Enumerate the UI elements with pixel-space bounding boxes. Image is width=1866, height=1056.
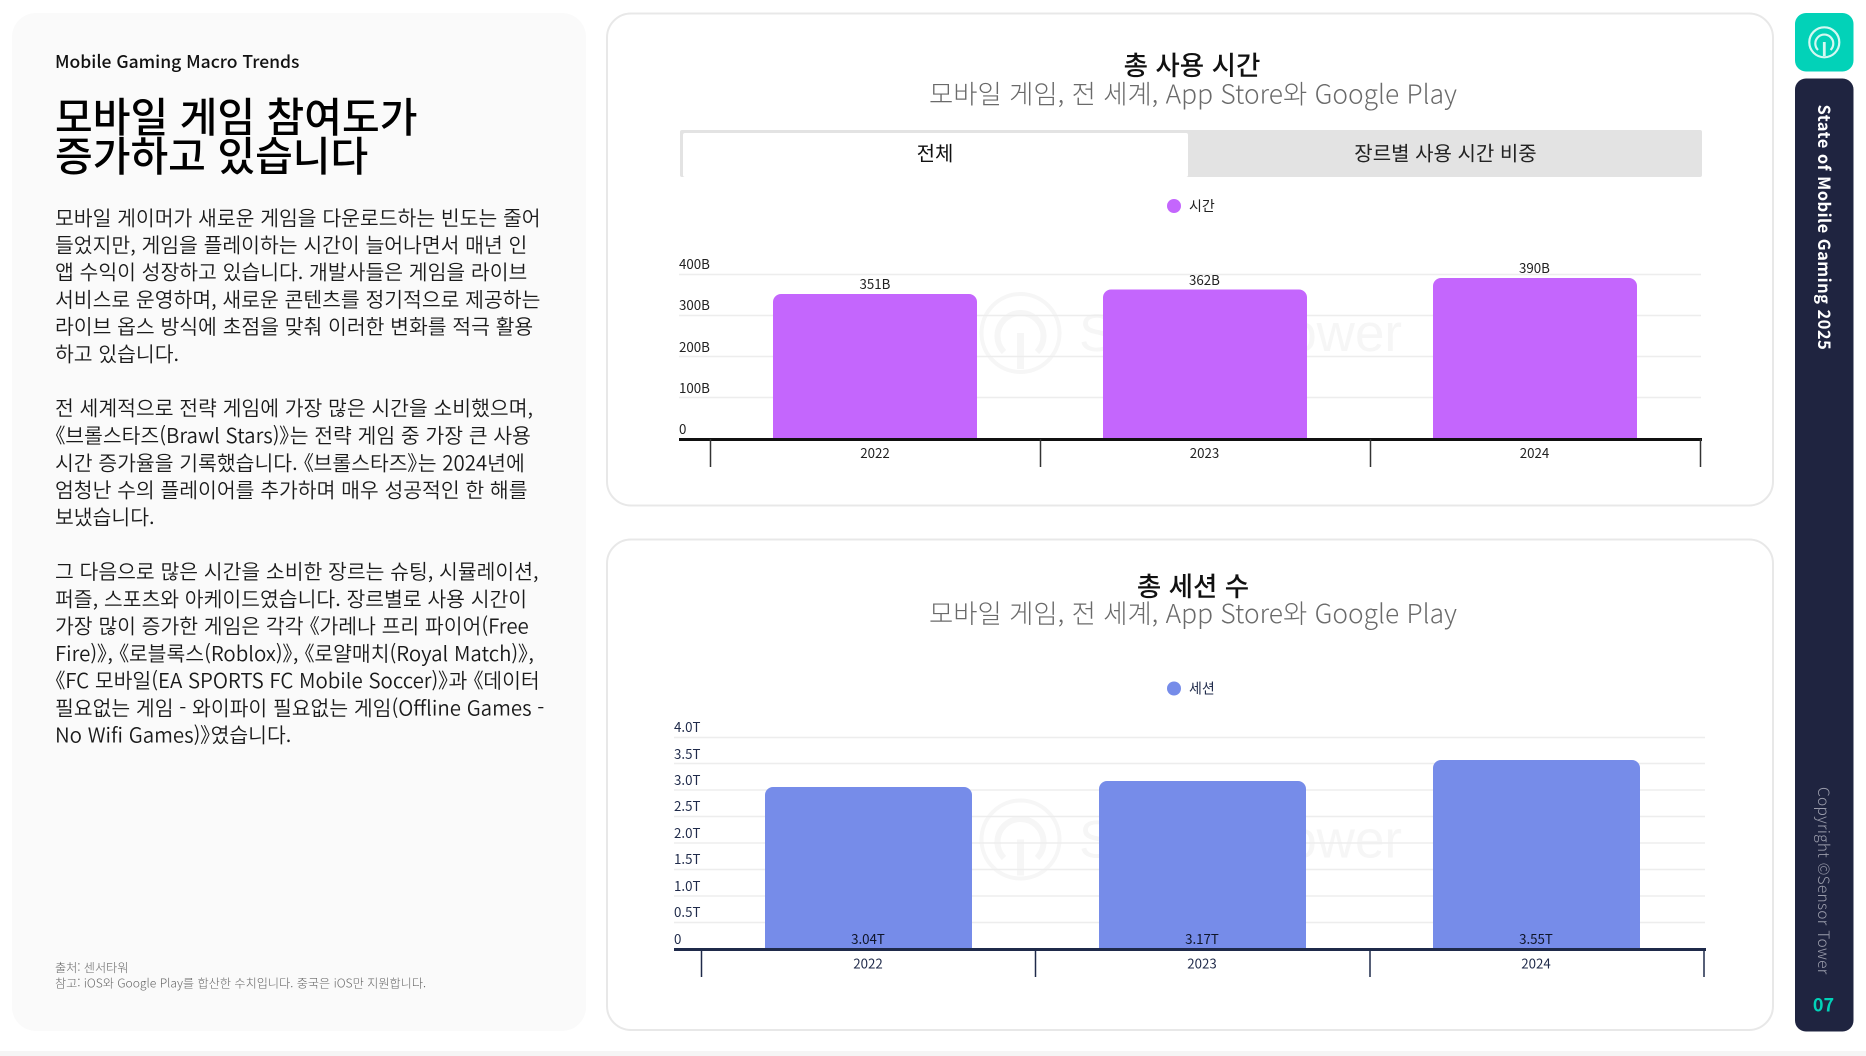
legend: 세션 <box>1189 678 1215 698</box>
bar value labels <box>860 258 1550 293</box>
y axis labels: 3.5T <box>674 744 700 763</box>
page number: 07 <box>1813 992 1834 1018</box>
source note: 출처: 센서타워 <box>55 959 128 976</box>
main heading: 모바일 게임 참여도가 <box>55 84 417 144</box>
report title: State of Mobile Gaming 2025 <box>1813 104 1837 350</box>
chart title: 총 사용 시간 <box>1124 44 1260 83</box>
y axis labels: 1.5T <box>674 849 700 868</box>
y axis labels: 2.0T <box>674 823 700 842</box>
icon: sensor tower logo <box>1795 13 1854 72</box>
main heading <box>55 84 417 183</box>
y axis labels: 4.0T <box>674 717 700 736</box>
bar value labels: 351B <box>860 274 891 293</box>
watermark: Sensor Tower <box>1079 810 1402 870</box>
bars <box>765 760 1640 949</box>
bar value labels: 3.04T <box>851 929 885 948</box>
y axis labels: 2.5T <box>674 796 700 815</box>
paragraph 1: 모바일 게이머가 새로운 게임을 다운로드하는 빈도는 줄어 <box>55 201 541 231</box>
panel: total time spent chart <box>607 14 1773 506</box>
tab bar: 전체 <box>917 138 953 166</box>
paragraph 3: Fire)》, 《로블록스(Roblox)》, 《로얄매치(Royal Match)》, <box>55 637 534 667</box>
watermark <box>982 800 1402 878</box>
y axis labels <box>674 717 700 948</box>
tab bar <box>680 130 1702 177</box>
chart subtitle: 모바일 게임, 전 세계, App Store와 Google Play <box>929 592 1457 631</box>
paragraph 1 <box>55 201 541 367</box>
paragraph 3: 《FC 모바일(EA SPORTS FC Mobile Soccer)》과 《데이터 <box>55 664 540 694</box>
bar value labels: 3.55T <box>1519 929 1553 948</box>
copyright: Copyright ©Sensor Tower <box>1813 787 1835 975</box>
panel: text column <box>12 13 586 1031</box>
y axis labels: 1.0T <box>674 876 700 895</box>
legend <box>1167 196 1215 216</box>
source note <box>55 959 426 992</box>
x axis: 2024 <box>1520 443 1549 462</box>
section label: Mobile Gaming Macro Trends <box>55 49 299 74</box>
paragraph 1: 들었지만, 게임을 플레이하는 시간이 늘어나면서 매년 인 <box>55 228 527 258</box>
watermark <box>982 294 1402 372</box>
main heading: 증가하고 있습니다 <box>55 123 368 183</box>
chart subtitle: 모바일 게임, 전 세계, App Store와 Google Play <box>929 72 1457 112</box>
y axis labels: 300B <box>679 295 710 314</box>
paragraph 3 <box>55 555 544 748</box>
source note: 참고: iOS와 Google Play를 합산한 수치입니다. 중국은 iOS만 지원합니다. <box>55 974 426 992</box>
panel: total sessions chart <box>607 540 1773 1030</box>
y axis labels: 100B <box>679 378 710 397</box>
tab bar: 장르별 사용 시간 비중 <box>1354 138 1537 166</box>
paragraph 1: 하고 있습니다. <box>55 337 179 367</box>
bar value labels: 3.17T <box>1185 929 1219 948</box>
x axis: 2022 <box>853 954 883 972</box>
legend <box>1167 678 1215 698</box>
y axis labels: 3.0T <box>674 770 700 789</box>
y axis labels: 400B <box>679 254 710 273</box>
paragraph 3: 그 다음으로 많은 시간을 소비한 장르는 슈팅, 시뮬레이션, <box>55 555 539 585</box>
x axis <box>679 438 1702 467</box>
bar value labels: 362B <box>1189 270 1220 289</box>
y axis labels: 0.5T <box>674 902 700 921</box>
paragraph 3: 가장 많이 증가한 게임은 각각 《가레나 프리 파이어(Free <box>55 610 529 640</box>
paragraph 3: 필요없는 게임 - 와이파이 필요없는 게임(Offline Games - <box>55 692 544 722</box>
chart title: 총 세션 수 <box>1137 565 1249 604</box>
bar chart: sessions <box>674 717 1706 977</box>
x axis: 2024 <box>1521 954 1551 972</box>
paragraph 3: No Wifi Games)》였습니다. <box>55 718 291 748</box>
bar value labels <box>851 929 1553 948</box>
sidebar <box>1795 78 1854 1032</box>
x axis: 2023 <box>1187 954 1217 972</box>
bar chart: time <box>679 254 1702 467</box>
y axis labels: 0 <box>679 419 686 438</box>
paragraph 3: 퍼즐, 스포츠와 아케이드였습니다. 장르별로 사용 시간이 <box>55 582 527 612</box>
x axis <box>674 948 1706 977</box>
x axis: 2022 <box>860 443 890 462</box>
y axis labels <box>679 254 710 438</box>
bars <box>773 278 1637 439</box>
x axis: 2023 <box>1190 443 1219 462</box>
paragraph 2: 보냈습니다. <box>55 500 155 530</box>
paragraph 2: 엄청난 수의 플레이어를 추가하며 매우 성공적인 한 해를 <box>55 474 528 504</box>
bar value labels: 390B <box>1519 258 1550 277</box>
paragraph 1: 서비스로 운영하며, 새로운 콘텐츠를 정기적으로 제공하는 <box>55 283 540 313</box>
paragraph 1: 라이브 옵스 방식에 초점을 맞춰 이러한 변화를 적극 활용 <box>55 310 533 340</box>
y axis labels: 0 <box>674 929 681 948</box>
legend: 시간 <box>1189 196 1215 216</box>
paragraph 2: 시간 증가율을 기록했습니다. 《브롤스타즈》는 2024년에 <box>55 446 525 476</box>
paragraph 2: 《브롤스타즈(Brawl Stars)》는 전략 게임 중 가장 큰 사용 <box>55 419 531 449</box>
watermark: Sensor Tower <box>1079 304 1402 363</box>
paragraph 2: 전 세계적으로 전략 게임에 가장 많은 시간을 소비했으며, <box>55 392 533 422</box>
paragraph 2 <box>55 392 533 530</box>
paragraph 1: 앱 수익이 성장하고 있습니다. 개발사들은 게임을 라이브 <box>55 256 527 286</box>
y axis labels: 200B <box>679 337 710 356</box>
